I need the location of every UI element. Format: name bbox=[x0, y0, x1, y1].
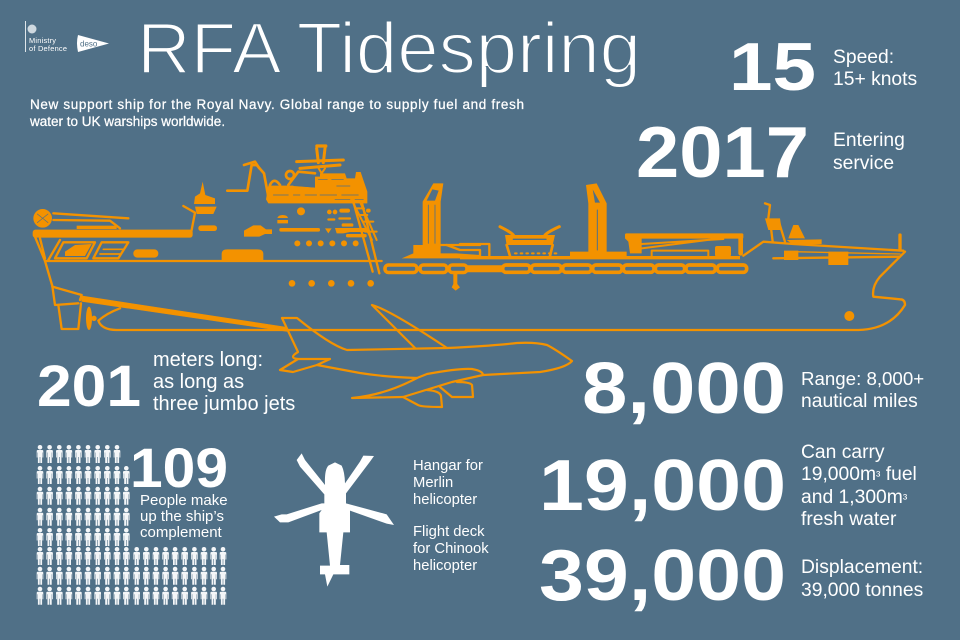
stat: range label: Range: 8,000+ bbox=[801, 368, 924, 389]
stat: displacement label: Displacement: bbox=[801, 557, 923, 578]
ship: lozenge deck chain bbox=[503, 265, 747, 272]
stat: fuel number: 19,000 bbox=[539, 446, 786, 526]
stat: speed number: 15 bbox=[729, 29, 816, 105]
logo: Ministry of Defence bbox=[25, 21, 67, 53]
stat: length number: 201 bbox=[37, 354, 141, 419]
intro text: New support ship for the Royal Navy. Global range to supply fuel and fresh bbox=[30, 97, 524, 112]
jumbo jet outline bbox=[280, 305, 572, 407]
logo: Ministry of Defence: Ministry bbox=[29, 36, 56, 45]
helicopter text: hangar: Hangar for bbox=[413, 458, 483, 474]
stat: displacement number: 39,000 bbox=[539, 536, 786, 616]
ship: aft lozenge deck chain bbox=[385, 265, 503, 272]
stat: complement label: up the ship’s bbox=[140, 508, 224, 525]
stat: speed label: Speed: bbox=[833, 47, 894, 68]
ship: stern and hull aft bbox=[33, 144, 480, 331]
stat: fuel label: 19,000m³ fuel bbox=[801, 464, 917, 485]
stat: fuel label: fresh water bbox=[801, 509, 897, 530]
stat: length label: as long as bbox=[153, 371, 244, 393]
intro text: water to UK warships worldwide. bbox=[29, 114, 225, 129]
helicopter text: hangar: helicopter bbox=[413, 492, 477, 508]
logo: Ministry of Defence: of Defence bbox=[29, 44, 67, 53]
stat: service number: 2017 bbox=[636, 113, 809, 193]
helicopter text: flight deck: for Chinook bbox=[413, 541, 489, 557]
stat: range label: nautical miles bbox=[801, 391, 918, 412]
ship: superstructure bbox=[227, 144, 377, 240]
logo: deso bbox=[77, 35, 109, 52]
stat: fuel label: Can carry bbox=[801, 442, 885, 463]
stat: displacement label: 39,000 tonnes bbox=[801, 580, 923, 601]
stat: service label: service bbox=[833, 153, 894, 174]
stat: complement label: complement bbox=[140, 524, 223, 541]
icon: helicopter silhouette bbox=[274, 453, 394, 587]
people pictogram: 109 figures bbox=[37, 445, 226, 605]
stat: fuel label: and 1,300m³ bbox=[801, 487, 907, 508]
stat: service label: Entering bbox=[833, 130, 905, 151]
stat: length label: meters long: bbox=[153, 349, 263, 371]
logo: deso: deso bbox=[80, 40, 98, 48]
helicopter text: flight deck: helicopter bbox=[413, 558, 477, 574]
helicopter text: flight deck: Flight deck bbox=[413, 524, 485, 540]
stat: complement number: 109 bbox=[130, 436, 228, 499]
stat: speed label: 15+ knots bbox=[833, 69, 917, 90]
ship illustration bbox=[33, 144, 905, 331]
stat: complement label: People make bbox=[140, 492, 228, 509]
title: RFA Tidespring bbox=[137, 9, 641, 89]
ship: first crane bbox=[382, 183, 480, 258]
stat: range number: 8,000 bbox=[582, 349, 786, 429]
ship: midship and bow bbox=[447, 183, 905, 330]
stat: length label: three jumbo jets bbox=[153, 393, 295, 415]
ship: second crane bbox=[586, 183, 607, 253]
helicopter text: hangar: Merlin bbox=[413, 475, 453, 491]
